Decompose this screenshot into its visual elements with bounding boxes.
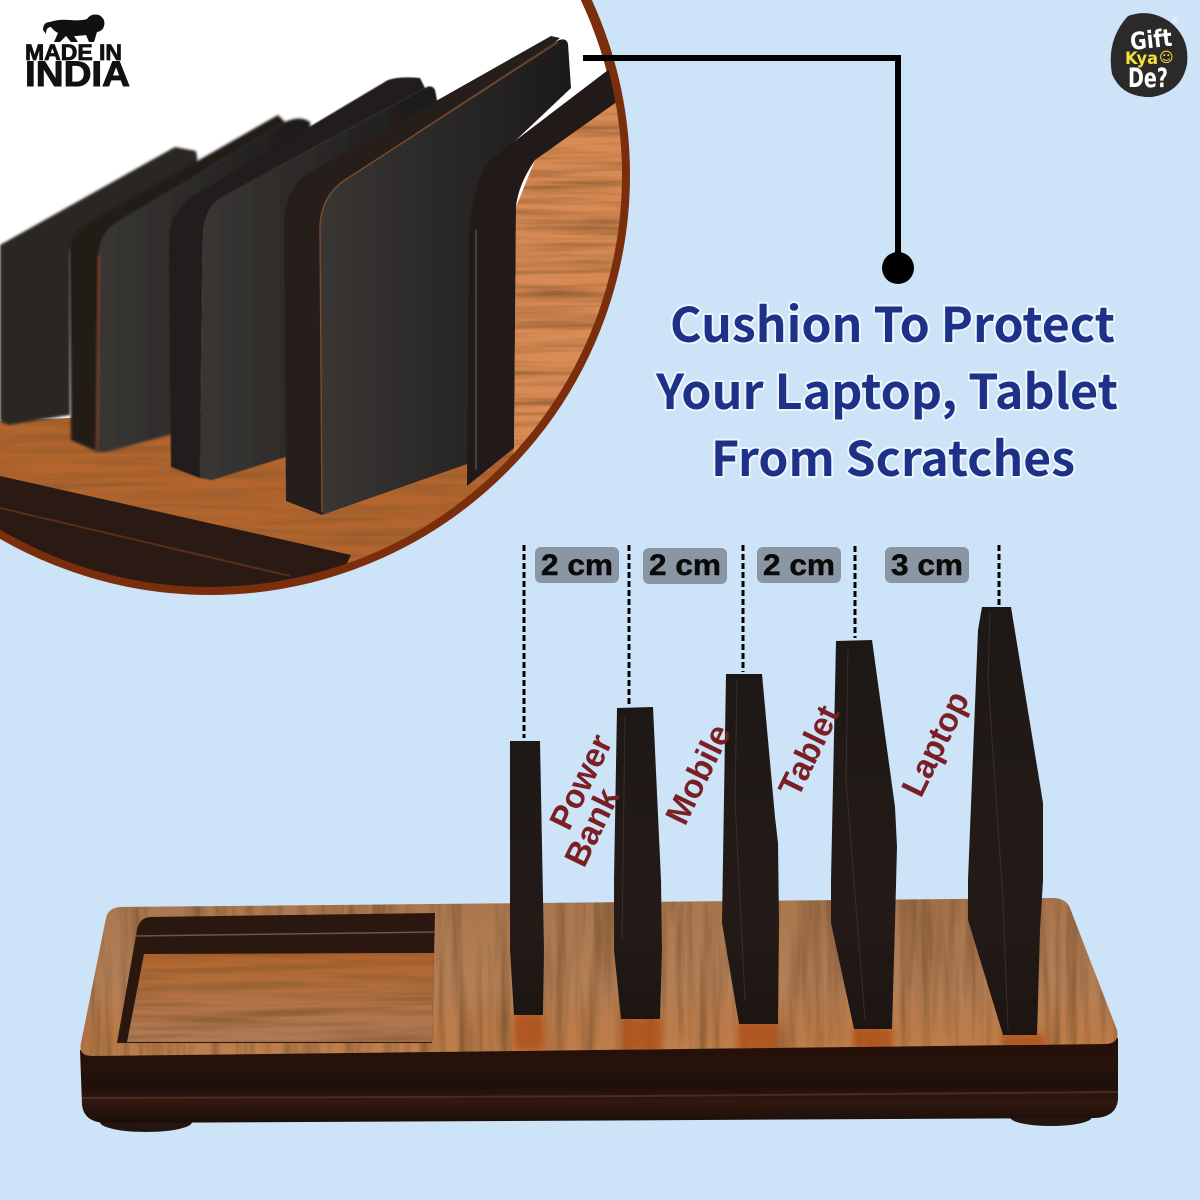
heading <box>655 286 1118 490</box>
heading: Cushion To Protect <box>670 286 1115 356</box>
gift kya de logo: ☺ <box>1159 50 1174 66</box>
tray <box>117 913 440 1045</box>
gift kya de logo: Gift <box>1129 24 1173 56</box>
made in india logo: MADE IN <box>25 40 122 65</box>
label: power bank <box>543 729 627 873</box>
label: power bank: Power <box>543 729 620 836</box>
base top wood <box>75 895 1125 1060</box>
wood panel face with grain <box>513 100 622 454</box>
spacing badge 1: 2 cm <box>541 549 613 582</box>
gift kya de logo: De? <box>1128 63 1168 94</box>
icon: lion <box>43 14 104 42</box>
gift kya de logo: Kya <box>1125 49 1158 69</box>
label: mobile: Mobile <box>659 719 739 831</box>
foam panel 1 <box>0 147 200 425</box>
divider: tablet <box>722 674 779 1024</box>
made in india logo <box>25 14 130 94</box>
gift kya de logo: ® <box>1172 16 1178 25</box>
base front edge <box>0 476 351 587</box>
divider: laptop <box>968 607 1043 1035</box>
made in india logo: INDIA <box>25 55 130 94</box>
label: power bank: Bank <box>558 782 627 873</box>
label: laptop: Laptop <box>895 686 977 803</box>
divider: mobile <box>614 707 662 1019</box>
gift kya de logo <box>1111 13 1187 97</box>
foam panel 3 <box>169 77 440 480</box>
divider: tablet large <box>831 640 897 1029</box>
dotted guide lines <box>524 545 999 738</box>
spacing badge 3: 2 cm <box>763 549 835 582</box>
spacing badge 4: 3 cm <box>891 549 963 582</box>
heading: From Scratches <box>711 420 1075 490</box>
base side <box>80 1038 1118 1123</box>
zoomed detail circle <box>0 0 640 640</box>
callout leader line <box>583 58 914 284</box>
feet <box>100 1108 1092 1132</box>
wood floor <box>0 412 520 587</box>
divider: power bank <box>510 741 544 1015</box>
spacing badge 2: 2 cm <box>649 549 721 582</box>
product: wooden stand <box>75 607 1125 1132</box>
foam panel 2 <box>69 115 312 452</box>
heading: Your Laptop, Tablet <box>655 353 1118 423</box>
foam panel 5 edge <box>467 67 625 486</box>
foam panel 4 <box>284 36 571 515</box>
label: tablet: Tablet <box>772 700 847 803</box>
